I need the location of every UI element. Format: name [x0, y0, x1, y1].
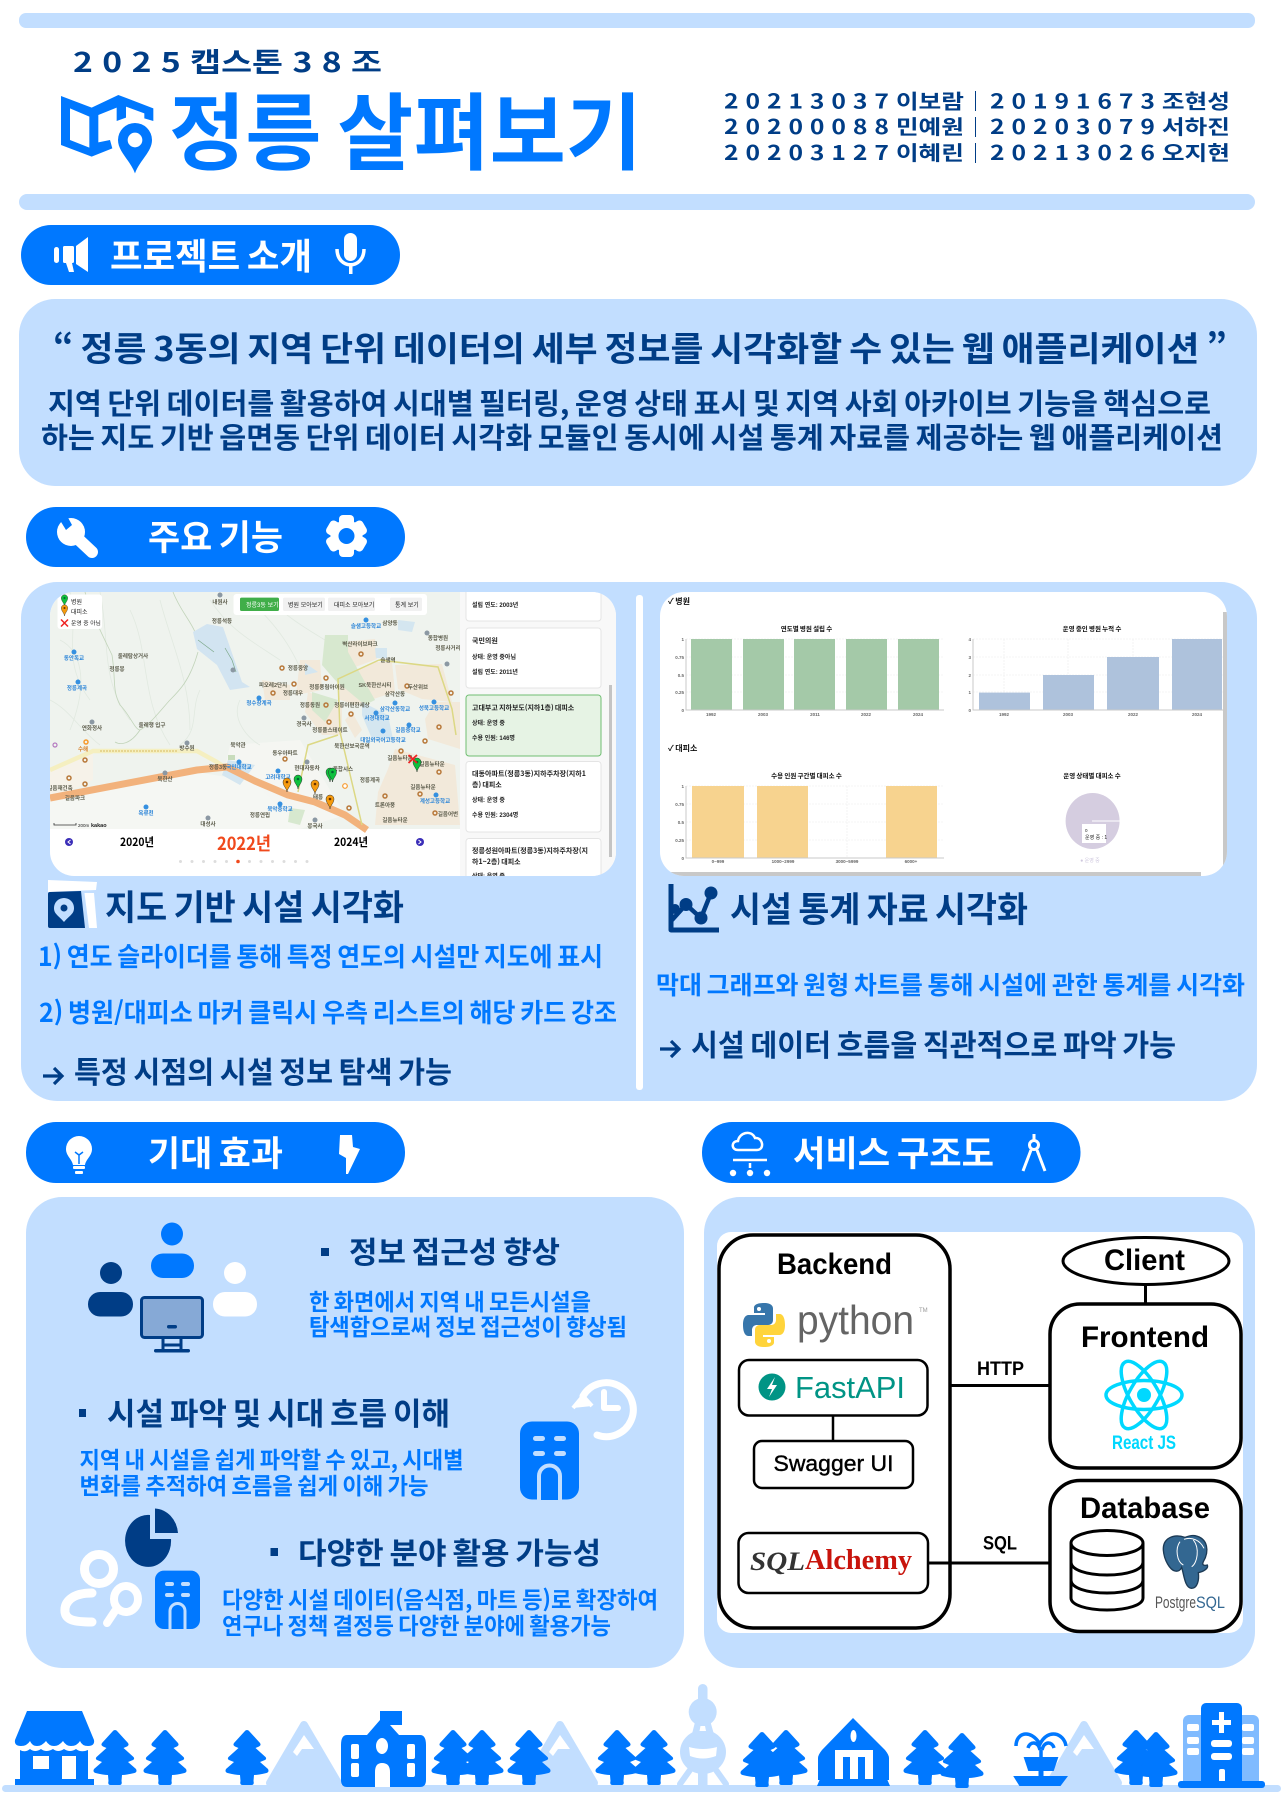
team member list	[724, 86, 1230, 166]
map place labels: 봉국사	[307, 822, 323, 830]
map place labels: 삼양동	[382, 619, 398, 627]
bar chart: cumulative hospitals	[979, 639, 1222, 710]
logo: PostgreSQL: Postgre	[1155, 1593, 1196, 1612]
map place labels: 대성사	[200, 820, 216, 828]
screenshot: map with year slider: 2024년	[334, 834, 368, 850]
box: SQLAlchemy	[738, 1533, 928, 1593]
section pill: 기대 효과	[26, 1122, 405, 1183]
screenshot: statistics charts: 4	[968, 637, 971, 642]
map place labels: 정릉연립	[250, 811, 270, 819]
screenshot: statistics charts: 0.25	[675, 690, 684, 695]
client ellipse	[1063, 1238, 1229, 1284]
logo: python: python	[797, 1297, 914, 1343]
map place labels: 둘레쟁 입구	[139, 721, 165, 729]
effect 2 text: 변화를 추적하여 흐름을 쉽게 이해 가능	[80, 1467, 428, 1501]
screenshot: map with year slider: 층) 대피소	[472, 780, 502, 790]
skyline: pale mountains	[270, 1725, 1118, 1783]
map buttons	[234, 594, 427, 615]
panel: service architecture	[704, 1197, 1255, 1668]
screenshot: map with year slider: 고대부고 지하보도(지하1층) 대피소	[472, 703, 575, 713]
effect 3 text: 연구나 정책 결정등 다양한 분야에 활용가능	[222, 1607, 611, 1641]
map place labels: 정릉석등	[212, 617, 232, 625]
map place labels: 종합병원	[428, 634, 448, 642]
map place labels: 정릉이편한세상	[334, 701, 370, 709]
box: frontend: Frontend	[1081, 1321, 1209, 1354]
box: database	[1050, 1480, 1241, 1632]
box: frontend	[1050, 1304, 1241, 1468]
screenshot: map with year slider: 성북고등학교	[419, 704, 449, 712]
map place labels: 북한산보국문역	[334, 742, 370, 750]
map place labels: 길음어번	[438, 810, 458, 818]
screenshot: statistics charts: 3000~5999	[836, 859, 859, 864]
screenshot: statistics charts: 운영 상태별 대피소 수	[1063, 771, 1121, 780]
box: FastAPI	[739, 1360, 928, 1416]
team member list: 2 0 2 1 3 0 3 7 이보람	[724, 86, 964, 114]
screenshot: statistics charts: 0	[1085, 828, 1088, 833]
map markers	[294, 775, 302, 789]
icon: cloud network	[730, 1133, 770, 1176]
bar chart: hospitals founded per year	[691, 639, 939, 710]
screenshot: statistics charts: 2024	[1192, 712, 1203, 717]
screenshot: map with year slider: 북악중학교	[267, 805, 293, 813]
section pill: 서비스 구조도	[702, 1122, 1080, 1183]
map terrain	[50, 592, 460, 829]
effect 2 text: 지역 내 시설을 쉽게 파악할 수 있고, 시대별	[80, 1441, 464, 1475]
feature heading: map visualization: 지도 기반 시설 시각화	[105, 880, 404, 931]
screenshot: statistics charts: 1	[681, 637, 684, 642]
icon: gear	[325, 515, 368, 557]
screenshot: map with year slider: 2020년	[120, 834, 154, 850]
screenshot: statistics charts: 수용 인원 구간별 대피소 수	[771, 771, 842, 780]
skyline: fountain	[1015, 1734, 1066, 1785]
box: Swagger UI	[754, 1441, 913, 1488]
effect 3 text: 다양한 시설 데이터(음식점, 마트 등)로 확장하여	[222, 1581, 658, 1615]
map place labels: 북악관	[230, 741, 246, 749]
icon: microphone	[337, 233, 364, 274]
section pill: 서비스 구조도: 서비스 구조도	[793, 1126, 994, 1177]
skyline: museum	[817, 1718, 890, 1786]
panel: project intro: 지역 단위 데이터를 활용하여 시대별 필터링, 운영 상태 표시 및 지역 사회 아카이브 기능을 핵심으로	[48, 381, 1211, 423]
icon: light bulb	[66, 1136, 92, 1174]
logo: PostgreSQL	[1155, 1535, 1225, 1612]
map scale	[54, 823, 76, 825]
feature result: statistics: 시설 데이터 흐름을 직관적으로 파악 가능	[691, 1021, 1176, 1065]
section pill: 프로젝트 소개	[21, 225, 400, 285]
icon: small building	[155, 1571, 200, 1629]
skyline: hospital	[1178, 1703, 1265, 1788]
map place labels: 수해	[78, 745, 88, 753]
facility list cards	[460, 592, 616, 876]
map place labels: 경국사	[296, 720, 312, 728]
map place labels: 태릉	[313, 793, 323, 801]
year slider	[65, 838, 73, 846]
icon: clock with return arrow	[573, 1383, 633, 1437]
team member list: 2 0 2 0 3 1 2 7 이혜린	[724, 137, 964, 166]
screenshot: map with year slider: 상태: 운영 중	[472, 872, 505, 880]
screenshot: map with year slider: 대동아파트(정릉3동)지하주차장(지하1	[472, 769, 586, 779]
screenshot: map with year slider: 계성고등학교	[420, 797, 450, 805]
screenshot: map with year slider: 옥류천	[138, 809, 154, 817]
screenshot: statistics charts: ✓ 병원	[668, 596, 690, 607]
map urban blocks	[262, 639, 460, 825]
map place labels: 정릉3동	[209, 763, 227, 771]
section pill: 프로젝트 소개: 프로젝트 소개	[110, 228, 312, 280]
feature result: map: 특정 시점의 시설 정보 탐색 가능	[74, 1048, 452, 1092]
panel: project intro	[19, 299, 1257, 486]
icon: line chart	[670, 884, 719, 930]
effect 1 heading: 정보 접근성 향상	[349, 1228, 560, 1272]
screenshot: statistics charts: 6000+	[905, 859, 918, 864]
screenshot: statistics charts: 0.5	[678, 673, 684, 678]
map place labels: 길음뉴타운	[387, 754, 413, 762]
icon: folded map with pin	[48, 880, 97, 928]
map place labels: 동우아파트	[272, 749, 298, 757]
team member list: 2 0 1 9 1 6 7 3 조현성	[990, 86, 1230, 114]
screenshot: statistics charts: 0	[681, 856, 684, 861]
map roads	[50, 751, 227, 770]
panel: expected effects	[26, 1197, 684, 1668]
map place labels: 길음파크	[65, 794, 85, 802]
icon: pie chart	[125, 1508, 178, 1567]
map contours	[50, 592, 325, 745]
icon: building	[520, 1422, 579, 1500]
screenshot: statistics charts: 1992	[706, 712, 717, 717]
panel: project intro: 하는 지도 기반 읍면동 단위 데이터 시각화 모듈인 동시에 시설 통계 자료를 제공하는 웹 애플리케이션	[41, 415, 1223, 457]
logo: folded map with pin	[61, 95, 153, 173]
effect 1 text	[309, 1283, 627, 1342]
screenshot: statistics charts: 운영 중 : 1	[1085, 834, 1107, 841]
top header bar	[19, 13, 1255, 28]
map place labels: 정릉사거리	[435, 644, 461, 652]
screenshot: map with year slider: kakao	[91, 823, 107, 829]
screenshot: statistics charts: 1	[681, 784, 684, 789]
connector: SQL	[928, 1534, 1050, 1563]
screenshot: statistics charts: 2	[968, 673, 971, 678]
screenshot: map with year slider: 동안독교	[64, 654, 84, 662]
screenshot: map with year slider: 200m	[78, 823, 90, 828]
effect 3 text	[222, 1581, 658, 1641]
screenshot: map with year slider: 삼각산동학교	[380, 705, 410, 713]
screenshot: map with year slider: 수용 인원: 2304명	[472, 811, 518, 819]
screenshot: statistics charts: 2022	[861, 712, 872, 717]
map place labels: 북한산	[157, 775, 173, 783]
map place labels: 정릉계곡	[360, 776, 380, 784]
map place labels: 연화정사	[82, 724, 102, 732]
screenshot: statistics charts: 0.25	[675, 838, 684, 843]
section pill: 주요 기능: 주요 기능	[148, 510, 283, 561]
header bottom bar	[19, 194, 1255, 210]
screenshot: map with year slider: 상태: 운영 중	[472, 796, 505, 804]
map place labels: 길음뉴타운	[410, 783, 436, 791]
screenshot: map with year slider: 서경대학교	[364, 714, 390, 722]
screenshot: map with year slider	[47, 585, 616, 888]
screenshot: map with year slider: 길음중학교	[395, 726, 421, 734]
box: SQLAlchemy: Alchemy	[805, 1545, 912, 1576]
panel: key features	[21, 582, 1257, 1101]
client ellipse: Client	[1104, 1244, 1185, 1277]
screenshot: map with year slider: 대일외국어고등학교	[360, 736, 406, 744]
connector: HTTP	[950, 1359, 1050, 1386]
map legend	[58, 594, 102, 629]
map place labels: 길음뉴타운	[419, 760, 445, 768]
screenshot: map with year slider: 상태: 운영 중	[472, 719, 505, 727]
screenshot: statistics charts: 3	[968, 655, 971, 660]
screenshot: statistics charts	[660, 592, 1227, 876]
screenshot: map with year slider: 운영 중 아님	[71, 619, 101, 627]
team member list: 2 0 2 0 3 0 7 9 서하진	[990, 111, 1230, 140]
arrow	[43, 1068, 62, 1084]
feature text: marker click: 2) 병원/대피소 마커 클릭시 우측 리스트의 해당 카드 강조	[39, 993, 617, 1030]
screenshot: statistics charts: 0	[968, 708, 971, 713]
screenshot: map with year slider: 정릉3동 보기	[246, 601, 279, 609]
section pill: 기대 효과: 기대 효과	[148, 1126, 283, 1177]
screenshot: map with year slider: 수용 인원: 146명	[472, 734, 515, 742]
feature text: charts: 막대 그래프와 원형 차트를 통해 시설에 관한 통계를 시각화	[656, 966, 1245, 1002]
map place labels: 내원사	[212, 598, 228, 606]
screenshot: map with year slider: 정릉성원아파트(정릉3동)지하주차장(지	[472, 846, 588, 856]
screenshot: statistics charts: 0.75	[675, 655, 684, 660]
box: backend	[719, 1235, 950, 1628]
map place labels: 길음재건축	[47, 784, 73, 792]
panel: project intro: “ 정릉 3동의 지역 단위 데이터의 세부 정보를 시각화할 수 있는 웹 애플리케이션 ”	[53, 322, 1227, 371]
logo: python	[743, 1297, 928, 1347]
logo: PostgreSQL: SQL	[1196, 1593, 1225, 1612]
chart grid	[686, 639, 1223, 858]
screenshot: map with year slider: 정릉계곡	[67, 684, 87, 692]
map place labels: 길음뉴타운	[382, 816, 408, 824]
box: backend: Backend	[777, 1248, 892, 1281]
screenshot: statistics charts: ✓ 대피소	[668, 743, 698, 754]
team member list: 2 0 2 1 3 0 2 6 오지현	[990, 137, 1230, 166]
feature text: year slider: 1) 연도 슬라이더를 통해 특정 연도의 시설만 지도에 표시	[38, 937, 603, 974]
icon: wrench	[57, 512, 92, 552]
section pill: 주요 기능	[26, 507, 405, 567]
box: FastAPI: FastAPI	[795, 1370, 905, 1405]
main title: 정릉 살펴보기	[169, 67, 642, 188]
map place labels: 솔샘역	[380, 656, 396, 664]
effect 2 heading: 시설 파악 및 시대 흐름 이해	[107, 1389, 450, 1434]
screenshot: statistics charts: 0.75	[675, 802, 684, 807]
screenshot: statistics charts: 2022	[1128, 712, 1139, 717]
logo: React	[1106, 1355, 1182, 1435]
map place labels: 트론아풍	[375, 801, 395, 809]
map place labels: 피오레2단지	[259, 681, 287, 689]
screenshot: statistics charts: 0.5	[678, 820, 684, 825]
screenshot: statistics charts: 0~999	[712, 859, 725, 864]
effect 3 heading: 다양한 분야 활용 가능성	[298, 1529, 601, 1573]
icon: person with magnifier	[65, 1554, 138, 1623]
screenshot: map with year slider: 하1~2층) 대피소	[472, 857, 521, 867]
screenshot: map with year slider: 국민대학교	[226, 763, 252, 771]
screenshot: statistics charts: 2024	[913, 712, 924, 717]
map place labels: 종합시스	[333, 765, 353, 773]
connector: HTTP: HTTP	[977, 1359, 1024, 1380]
map place labels: 둘레탐상거사	[118, 652, 148, 660]
screenshot: map with year slider: 2022년	[217, 830, 271, 856]
map place labels	[47, 598, 461, 830]
screenshot: statistics charts: 2011	[810, 712, 820, 717]
skyline: shop	[15, 1711, 94, 1785]
screenshot: statistics charts: 2003	[1063, 712, 1074, 717]
screenshot: map with year slider: 고려대학교	[265, 773, 291, 781]
box: frontend: React JS	[1112, 1433, 1176, 1454]
map place labels: SK북한산시티	[359, 681, 391, 689]
screenshot: statistics charts: 운영 중인 병원 누적 수	[1063, 624, 1121, 633]
box: Swagger UI: Swagger UI	[774, 1451, 894, 1476]
connector: SQL: SQL	[983, 1534, 1017, 1554]
skyline: ground	[2, 1785, 1281, 1792]
map place labels: 정릉풍림아이원	[309, 683, 345, 691]
map place labels: 정릉동원	[300, 701, 320, 709]
map place labels: 정릉풀스테이트	[312, 726, 348, 734]
box: database: Database	[1080, 1492, 1210, 1525]
screenshot: map with year slider: 청수장계곡	[246, 699, 272, 707]
map place labels: 두산위브	[408, 683, 428, 691]
icon: database cylinder	[1071, 1530, 1143, 1610]
screenshot: map with year slider: 대피소	[71, 608, 88, 616]
map place dots	[67, 652, 453, 815]
map lake	[193, 624, 250, 690]
screenshot: map with year slider: 병원	[71, 598, 82, 606]
screenshot: statistics charts: 1	[968, 690, 971, 695]
screenshot: statistics charts: 연도별 병원 설립 수	[781, 624, 832, 633]
header: team label: 2 0 2 5 캡스톤 3 8 조	[73, 41, 382, 80]
effect 1 text: 한 화면에서 지역 내 모든시설을	[309, 1283, 591, 1317]
bar chart: shelters by capacity	[692, 786, 937, 858]
map place labels: 방수원	[179, 744, 195, 752]
screenshot: statistics charts: 0	[681, 708, 684, 713]
effect 2 text	[80, 1441, 464, 1501]
screenshot: statistics charts: 1992	[999, 712, 1010, 717]
pie chart: shelter status	[1066, 793, 1120, 849]
map place labels: 벽산라이브파크	[342, 640, 378, 648]
team member list: 2 0 2 0 0 0 8 8 민예원	[724, 111, 964, 140]
skyline: school	[341, 1711, 426, 1787]
screenshot: map with year slider: 국민의원	[472, 636, 498, 646]
screenshot: map with year slider: 통계 보기	[395, 601, 419, 609]
map place labels: 삼각산동	[385, 690, 405, 698]
screenshot: map with year slider: 대피소 모아보기	[334, 601, 374, 609]
skyline: trees	[94, 1730, 1178, 1788]
icon: drafting compass	[1023, 1134, 1045, 1171]
screenshot: map with year slider: 솔샘고등학교	[351, 622, 381, 630]
box: SQLAlchemy: SQL	[750, 1547, 805, 1576]
map place labels: 정릉중앙	[288, 664, 308, 672]
feature heading: statistics: 시설 통계 자료 시각화	[730, 882, 1028, 933]
icon: megaphone	[54, 237, 88, 272]
screenshot: map with year slider: 병원 모아보기	[288, 601, 323, 609]
screenshot: statistics charts: 1000~2999	[772, 859, 795, 864]
skyline: Seoul tower	[680, 1684, 726, 1786]
icon: lightning bolt	[339, 1135, 360, 1174]
screenshot: map with year slider: 설립 연도: 2011년	[472, 668, 518, 676]
logo: python: TM	[919, 1308, 928, 1314]
icon: people around monitor	[88, 1222, 257, 1352]
screenshot: statistics charts: 2003	[758, 712, 769, 717]
effect 1 text: 탐색함으로써 정보 접근성이 향상됨	[309, 1308, 627, 1342]
screenshot: map with year slider: 설립 연도: 2003년	[472, 601, 518, 609]
screenshot: map with year slider: 상태: 운영 중아님	[472, 653, 516, 661]
map place labels: 현대자동차	[294, 764, 320, 772]
map place labels: 정릉대우	[283, 689, 303, 697]
arrow	[660, 1041, 679, 1057]
screenshot: statistics charts: ● 운영 중	[1080, 857, 1100, 864]
map place labels: 정릉봉	[109, 665, 125, 673]
